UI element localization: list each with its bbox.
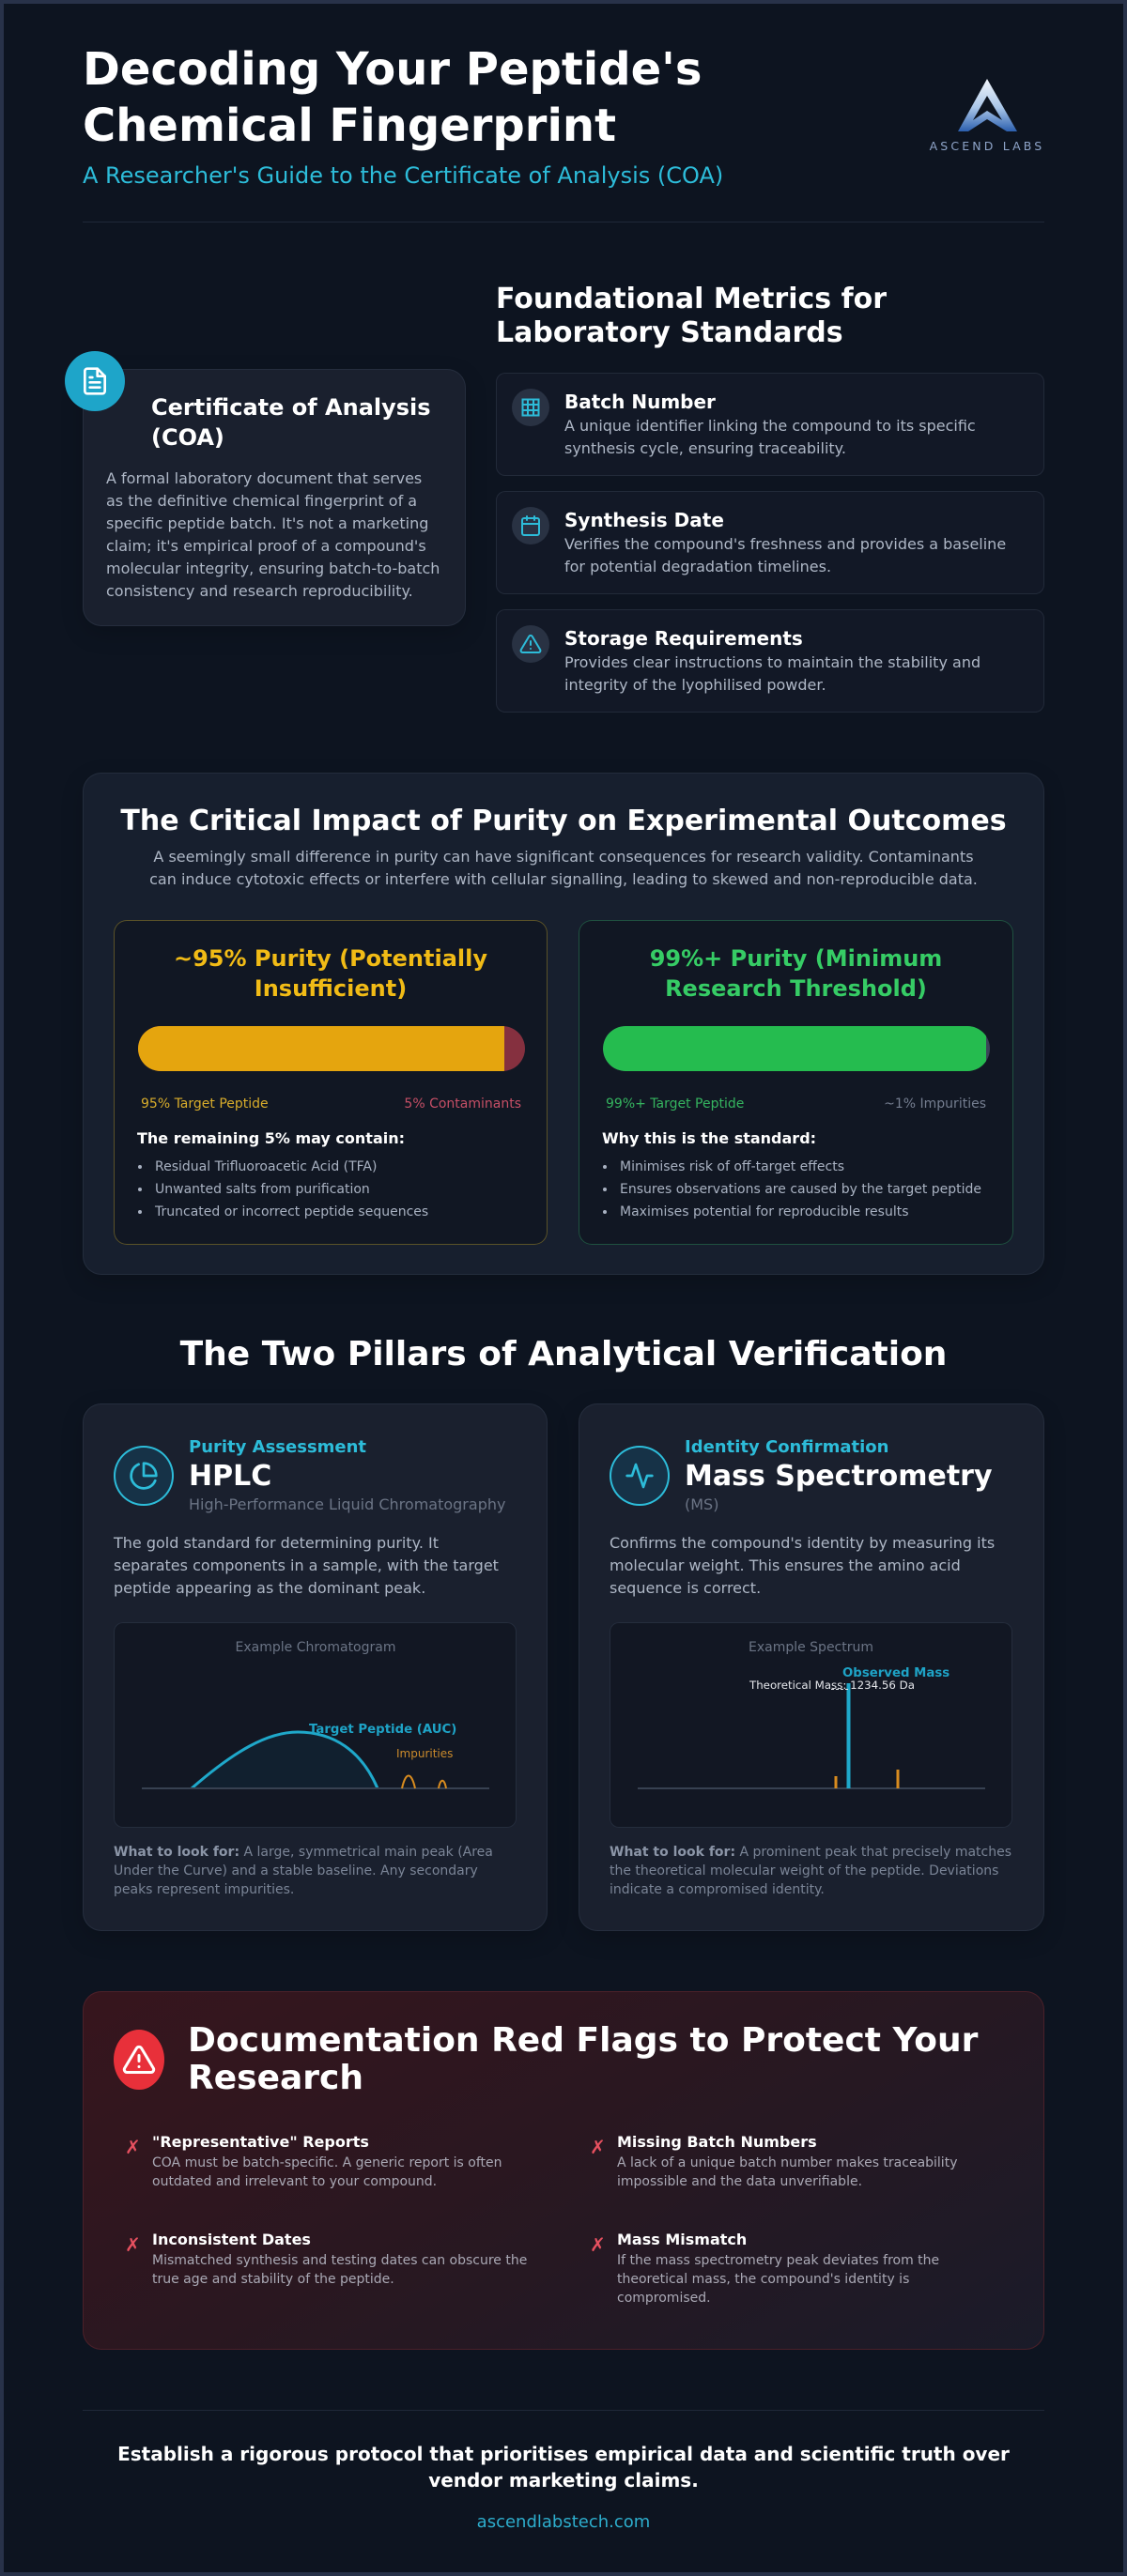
panel: impact of purity — [83, 773, 1044, 1275]
red flag: representative reports: "Representative" Reports — [152, 2133, 369, 2151]
subheading: why standard: Why this is the standard: — [602, 1129, 816, 1147]
subtitle: A Researcher's Guide to the Certificate of Analysis (COA) — [83, 162, 723, 189]
red flag: representative reports: ✗ — [125, 2136, 141, 2158]
metric text — [564, 535, 1006, 575]
icon: calendar — [512, 507, 549, 544]
footer — [117, 2443, 1010, 2532]
text: COA description: specific peptide batch. It's not a marketing — [106, 514, 428, 532]
red flag: mass mismatch: compromised. — [617, 2291, 711, 2306]
title: Decoding Your Peptide's — [83, 43, 702, 96]
label: 99% target: 99%+ Target Peptide — [606, 1096, 744, 1112]
text: what to look for HPLC: peaks represent impurities. — [114, 1882, 294, 1897]
heading: 99% purity: Research Threshold) — [665, 975, 927, 1002]
text: HPLC description — [113, 1534, 499, 1597]
red flag: mass mismatch: theoretical mass, the compound's identity is — [617, 2272, 909, 2287]
red flag: missing batch numbers: A lack of a unique batch number makes traceability — [617, 2155, 957, 2170]
heading: critical impact: The Critical Impact of Purity on Experimental Outcomes — [120, 805, 1007, 837]
panel: Certificate of Analysis — [83, 369, 466, 626]
website link: ascendlabstech.com — [477, 2512, 650, 2532]
closing statement — [117, 2443, 1010, 2492]
icon: alert — [114, 2030, 164, 2090]
metric text: Verifies the compound's freshness and provides a baseline — [564, 535, 1006, 553]
chart: spectrum: Observed Mass — [842, 1666, 949, 1680]
heading: foundational metrics: Foundational Metrics for — [496, 283, 887, 315]
list: contaminants: Truncated or incorrect peptide sequences — [155, 1204, 428, 1219]
label: 1% impurities: ~1% Impurities — [884, 1096, 986, 1112]
method name: HPLC: HPLC — [189, 1460, 271, 1493]
heading: 99% purity — [650, 945, 942, 1002]
metric text: synthesis cycle, ensuring traceability. — [564, 439, 846, 457]
panel: HPLC — [83, 1403, 548, 1931]
list: reasons: Minimises risk of off-target effects — [620, 1159, 844, 1174]
red flag: inconsistent dates: ✗ — [125, 2233, 141, 2256]
method abbreviation: (MS) — [685, 1495, 718, 1513]
text: what to look for MS — [610, 1845, 1011, 1897]
red flag: mass mismatch: ✗ — [590, 2233, 606, 2256]
heading: red flags — [188, 2021, 979, 2097]
list: contaminants: Unwanted salts from purification — [155, 1182, 370, 1197]
purity bar: 95% — [138, 1026, 525, 1071]
chart: spectrum — [610, 1622, 1012, 1828]
method full name: High-Performance Liquid Chromatography — [189, 1495, 505, 1513]
text: MS description: sequence is correct. — [610, 1579, 761, 1597]
method name: mass spectrometry: Mass Spectrometry — [685, 1460, 993, 1493]
text: what to look for MS: What to look for: A prominent peak that precisely matches — [610, 1845, 1011, 1860]
text: purity intro — [149, 848, 978, 888]
metric text: A unique identifier linking the compound to its specific — [564, 417, 976, 435]
text: COA description — [106, 469, 440, 600]
red flag: missing batch numbers: impossible and the data unverifiable. — [617, 2174, 862, 2189]
chart: chromatogram — [114, 1622, 517, 1828]
text: COA description: molecular integrity, ensuring batch-to-batch — [106, 560, 440, 577]
metric title: Storage Requirements — [564, 627, 803, 650]
text: HPLC description: The gold standard for determining purity. It — [114, 1534, 439, 1552]
red flag: mass mismatch — [590, 2231, 939, 2306]
logo: Ascend Labs: ASCEND LABS — [930, 139, 1044, 153]
red flag: mass mismatch: If the mass spectrometry peak deviates from the — [617, 2253, 939, 2268]
panel: foundational metrics — [496, 283, 1044, 713]
heading: red flags: Research — [188, 2059, 363, 2097]
metric text — [564, 653, 980, 694]
text: COA description: A formal laboratory document that serves — [106, 469, 422, 487]
chart: spectrum: Theoretical Mass: 1234.56 Da — [749, 1679, 915, 1692]
text: what to look for HPLC — [114, 1845, 493, 1897]
eyebrow: purity assessment: Purity Assessment — [189, 1437, 366, 1457]
panel: red flags — [83, 1991, 1044, 2350]
card: 99% purity — [579, 920, 1013, 1245]
heading: COA — [151, 394, 431, 451]
heading: red flags: Documentation Red Flags to Protect Your — [188, 2021, 978, 2060]
label: 95% target: 95% Target Peptide — [141, 1096, 269, 1112]
eyebrow: identity confirmation: Identity Confirmation — [685, 1437, 888, 1457]
text: HPLC description: peptide appearing as the dominant peak. — [114, 1579, 425, 1597]
red flag: inconsistent dates — [125, 2231, 527, 2287]
card: storage requirements — [496, 609, 1044, 713]
heading: foundational metrics: Laboratory Standards — [496, 316, 843, 349]
closing statement: vendor marketing claims. — [428, 2469, 699, 2492]
subheading: remaining 5%: The remaining 5% may contain: — [137, 1129, 405, 1147]
text: what to look for HPLC: What to look for: A large, symmetrical main peak (Area — [114, 1845, 493, 1860]
chart: chromatogram: Target Peptide (AUC) — [309, 1723, 456, 1737]
icon: pie chart — [114, 1446, 174, 1506]
list: reasons: Maximises potential for reproducible results — [620, 1204, 909, 1219]
red flag: missing batch numbers: ✗ — [590, 2136, 606, 2158]
title: Chemical Fingerprint — [83, 100, 616, 152]
red flag: missing batch numbers: Missing Batch Numbers — [617, 2133, 817, 2151]
logo: Ascend Labs — [930, 79, 1044, 153]
panel: mass spectrometry — [579, 1403, 1044, 1931]
red flag: mass mismatch: Mass Mismatch — [617, 2231, 747, 2248]
card: synthesis date — [496, 491, 1044, 594]
text: purity intro: A seemingly small difference in purity can have significant consequences for research validity. Contaminants — [153, 848, 974, 866]
list: reasons: Ensures observations are caused by the target peptide — [620, 1182, 981, 1197]
heading: 95% purity — [174, 945, 487, 1002]
closing statement: Establish a rigorous protocol that prioritises empirical data and scientific truth over — [117, 2443, 1010, 2465]
icon: document — [65, 351, 125, 411]
heading: 99% purity: 99%+ Purity (Minimum — [650, 945, 942, 972]
icon: grid — [512, 389, 549, 426]
text: MS description: Confirms the compound's identity by measuring its — [610, 1534, 995, 1552]
metric text: for potential degradation timelines. — [564, 558, 831, 575]
heading: 95% purity: Insufficient) — [255, 975, 407, 1002]
heading: foundational metrics — [496, 283, 887, 349]
card: batch number — [496, 373, 1044, 476]
metric text: Provides clear instructions to maintain the stability and — [564, 653, 980, 671]
red flag: inconsistent dates: Mismatched synthesis and testing dates can obscure the — [152, 2253, 527, 2268]
icon: activity — [610, 1446, 670, 1506]
card: 95% purity — [114, 920, 548, 1245]
red flag: inconsistent dates: true age and stability of the peptide. — [152, 2272, 394, 2287]
chart: spectrum: Example Spectrum — [749, 1640, 873, 1655]
header — [83, 43, 1044, 189]
red flag: missing batch numbers — [590, 2133, 958, 2189]
text: what to look for MS: the theoretical molecular weight of the peptide. Deviations — [610, 1863, 998, 1878]
list: reasons — [603, 1159, 981, 1219]
text: HPLC description: separates components in a sample, with the target — [114, 1556, 499, 1574]
text: COA description: claim; it's empirical proof of a compound's — [106, 537, 426, 555]
text: what to look for HPLC: Under the Curve) and a stable baseline. Any secondary — [114, 1863, 478, 1878]
heading: two pillars: The Two Pillars of Analytical Verification — [180, 1335, 947, 1373]
red flag: inconsistent dates: Inconsistent Dates — [152, 2231, 311, 2248]
heading: 95% purity: ~95% Purity (Potentially — [174, 945, 487, 972]
list: contaminants — [138, 1159, 428, 1219]
text: purity intro: can induce cytotoxic effects or interfere with cellular signalling, leading to skewed and non-reproducible data. — [149, 870, 978, 888]
chart: chromatogram: Example Chromatogram — [236, 1640, 395, 1655]
title — [83, 43, 702, 152]
metric text — [564, 417, 976, 457]
chart: chromatogram: Impurities — [396, 1747, 453, 1760]
text: COA description: consistency and research reproducibility. — [106, 582, 413, 600]
text: MS description — [610, 1534, 995, 1597]
metric text: integrity of the lyophilised powder. — [564, 676, 826, 694]
list: contaminants: Residual Trifluoroacetic Acid (TFA) — [155, 1159, 377, 1174]
heading: COA: (COA) — [151, 424, 224, 451]
red flag: representative reports — [125, 2133, 502, 2189]
text: what to look for MS: indicate a compromised identity. — [610, 1882, 825, 1897]
text: MS description: molecular weight. This ensures the amino acid — [610, 1556, 961, 1574]
heading: COA: Certificate of Analysis — [151, 394, 431, 421]
red flag: representative reports: outdated and irrelevant to your compound. — [152, 2174, 437, 2189]
red flag: representative reports: COA must be batch-specific. A generic report is often — [152, 2155, 502, 2170]
text: COA description: as the definitive chemical fingerprint of a — [106, 492, 417, 510]
purity bar: 99% — [603, 1026, 990, 1071]
icon: warning triangle — [512, 625, 549, 663]
metric title: Batch Number — [564, 391, 716, 413]
metric title: Synthesis Date — [564, 509, 724, 531]
label: 5% contaminants: 5% Contaminants — [404, 1096, 521, 1112]
